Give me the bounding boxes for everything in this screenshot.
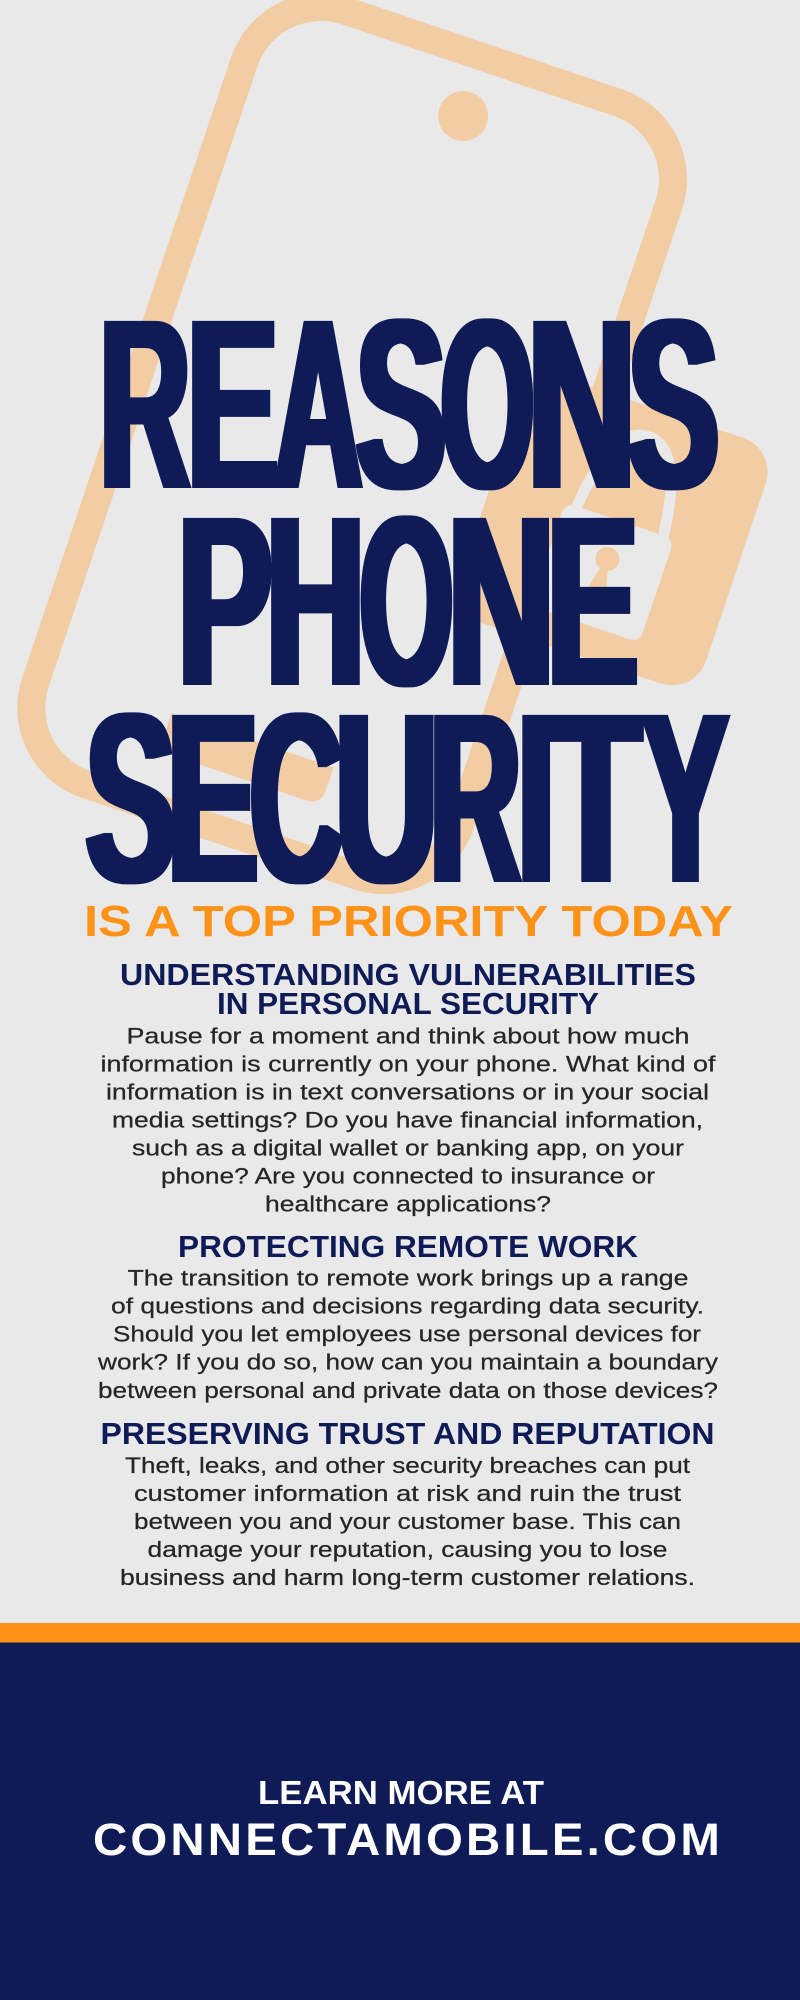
title: Reasons Phone Security: N xyxy=(447,464,555,737)
title: Reasons Phone Security: S xyxy=(356,268,446,540)
title: Reasons Phone Security: A xyxy=(274,268,362,540)
body text: of questions and decisions regarding data security. xyxy=(111,1294,704,1319)
orange divider band xyxy=(0,1623,800,1643)
title: Reasons Phone Security xyxy=(86,267,729,935)
title: Reasons Phone Security: N xyxy=(527,268,636,540)
body text xyxy=(100,1023,716,1216)
body text: information is currently on your phone. What kind of xyxy=(100,1051,716,1076)
body text: damage your reputation, causing you to lose xyxy=(148,1537,668,1562)
body text: business and harm long-term customer relations. xyxy=(120,1565,695,1590)
title: Reasons Phone Security: H xyxy=(266,465,365,737)
body text xyxy=(120,1453,695,1590)
section: protecting remote work xyxy=(97,1230,719,1403)
title: Reasons Phone Security: O xyxy=(360,464,453,737)
phone outline xyxy=(10,0,695,902)
body text: between you and your customer base. This can xyxy=(134,1509,681,1534)
body text: phone? Are you connected to insurance or xyxy=(161,1163,656,1188)
body text: between personal and private data on those devices? xyxy=(98,1378,718,1403)
body text: Pause for a moment and think about how much xyxy=(126,1023,690,1048)
title: Reasons Phone Security: E xyxy=(547,465,638,737)
padlock shackle xyxy=(575,422,692,539)
body text xyxy=(97,1266,719,1403)
body text: information is in text conversations or in your social xyxy=(106,1079,709,1104)
body text: Theft, leaks, and other security breaches can put xyxy=(125,1453,691,1478)
body text: The transition to remote work brings up a range xyxy=(128,1266,688,1291)
body text: work? If you do so, how can you maintain a boundary xyxy=(97,1350,719,1375)
title: Reasons Phone Security: R xyxy=(430,664,521,935)
phone camera dot xyxy=(431,84,495,148)
heading: PROTECTING REMOTE WORK xyxy=(178,1230,638,1264)
title: Reasons Phone Security: C xyxy=(250,664,343,934)
title: Reasons Phone Security: I xyxy=(517,663,555,934)
footer panel xyxy=(0,1642,800,2000)
body text: customer information at risk and ruin the trust xyxy=(134,1481,682,1506)
heading: PRESERVING TRUST AND REPUTATION xyxy=(100,1417,714,1451)
icon: tilted phone with padlock xyxy=(10,0,800,959)
title: Reasons Phone Security: P xyxy=(178,467,273,737)
title: Reasons Phone Security: E xyxy=(167,662,258,934)
body text: Should you let employees use personal devices for xyxy=(113,1322,702,1347)
title: Reasons Phone Security: T xyxy=(551,662,641,934)
call to action: LEARN MORE AT xyxy=(258,1774,544,1811)
title: Reasons Phone Security: R xyxy=(100,268,190,540)
body text: media settings? Do you have financial information, xyxy=(112,1107,703,1132)
phone home bar xyxy=(159,713,334,805)
title: Reasons Phone Security: E xyxy=(187,268,278,540)
title: Reasons Phone Security: S xyxy=(86,662,176,934)
website address: CONNECTAMOBILE.COM xyxy=(93,1814,723,1865)
section: preserving trust and reputation xyxy=(100,1417,714,1590)
subtitle: IS A TOP PRIORITY TODAY xyxy=(84,898,733,946)
title: Reasons Phone Security: Y xyxy=(642,664,729,934)
body text: healthcare applications? xyxy=(265,1191,551,1216)
body text: such as a digital wallet or banking app, on your xyxy=(132,1135,685,1160)
heading xyxy=(120,958,696,1021)
padlock keyhole xyxy=(584,544,623,600)
heading: IN PERSONAL SECURITY xyxy=(217,987,599,1021)
title: Reasons Phone Security: O xyxy=(441,267,534,540)
title: Reasons Phone Security: U xyxy=(335,663,438,934)
section: understanding vulnerabilities xyxy=(100,958,716,1216)
padlock body xyxy=(530,503,674,643)
lock tile xyxy=(448,366,777,695)
heading: UNDERSTANDING VULNERABILITIES xyxy=(120,958,696,992)
title: Reasons Phone Security: S xyxy=(628,268,719,540)
